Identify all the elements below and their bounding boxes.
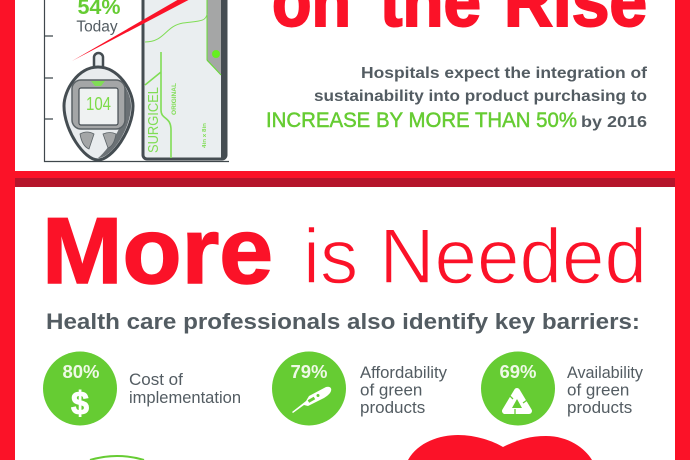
icon: thermometer bbox=[292, 387, 331, 413]
heading: on the Rise bbox=[272, 0, 647, 42]
text block: hospitals expect: INCREASE BY MORE THAN 50% bbox=[266, 108, 577, 132]
stat: 80% cost of implementation: 80% bbox=[62, 361, 100, 382]
heading: More is Needed bbox=[42, 198, 647, 303]
chart value: 54% today bbox=[76, 0, 121, 36]
icon: red heart, cropped bbox=[408, 435, 592, 460]
chart line: red rising wedge bbox=[72, 0, 198, 61]
stat: 80% cost of implementation: Cost of bbox=[129, 370, 183, 389]
heading: More is Needed: More bbox=[42, 198, 273, 303]
icon: surgicel product box: ORIGINAL bbox=[171, 83, 178, 115]
chart value: 54% today: Today bbox=[76, 18, 118, 36]
icon: surgicel product box bbox=[143, 0, 226, 159]
stat: 79% affordability: of green bbox=[360, 380, 422, 400]
text block: hospitals expect bbox=[266, 65, 648, 132]
icon: surgicel product box: 4in x 8in bbox=[202, 123, 208, 148]
text block: hospitals expect: sustainability into product purchasing to bbox=[314, 88, 647, 105]
text block: hospitals expect: Hospitals expect the integration of bbox=[361, 65, 648, 82]
icon: glucose meter: 104 bbox=[86, 94, 111, 114]
subheading: key barriers: Health care professionals also identify key barriers: bbox=[46, 309, 640, 334]
icon: green circle, cropped bbox=[90, 456, 144, 460]
stat: 79% affordability: Affordability bbox=[360, 363, 447, 382]
heading: More is Needed: is Needed bbox=[303, 212, 647, 300]
stat: 69% availability: products bbox=[567, 398, 632, 417]
stat: 69% availability: 69% bbox=[499, 361, 537, 382]
stat: 80% cost of implementation bbox=[43, 352, 241, 426]
stat: 79% affordability bbox=[272, 352, 447, 426]
stat: 69% availability: of green bbox=[567, 380, 629, 400]
icon: recycle bbox=[505, 391, 530, 417]
stat: 80% cost of implementation: implementation bbox=[129, 388, 241, 407]
text block: hospitals expect: by 2016 bbox=[581, 114, 647, 131]
stat: 69% availability bbox=[481, 352, 643, 426]
icon: glucose meter bbox=[64, 53, 133, 160]
stat: 79% affordability: 79% bbox=[290, 361, 328, 382]
stat: 79% affordability: products bbox=[360, 398, 425, 417]
stat: 69% availability: Availability bbox=[567, 363, 643, 382]
icon: dollar sign: $ bbox=[71, 385, 89, 421]
chart: rising line chart axes bbox=[44, 0, 229, 162]
icon: surgicel product box: SURGICEL bbox=[146, 87, 162, 153]
